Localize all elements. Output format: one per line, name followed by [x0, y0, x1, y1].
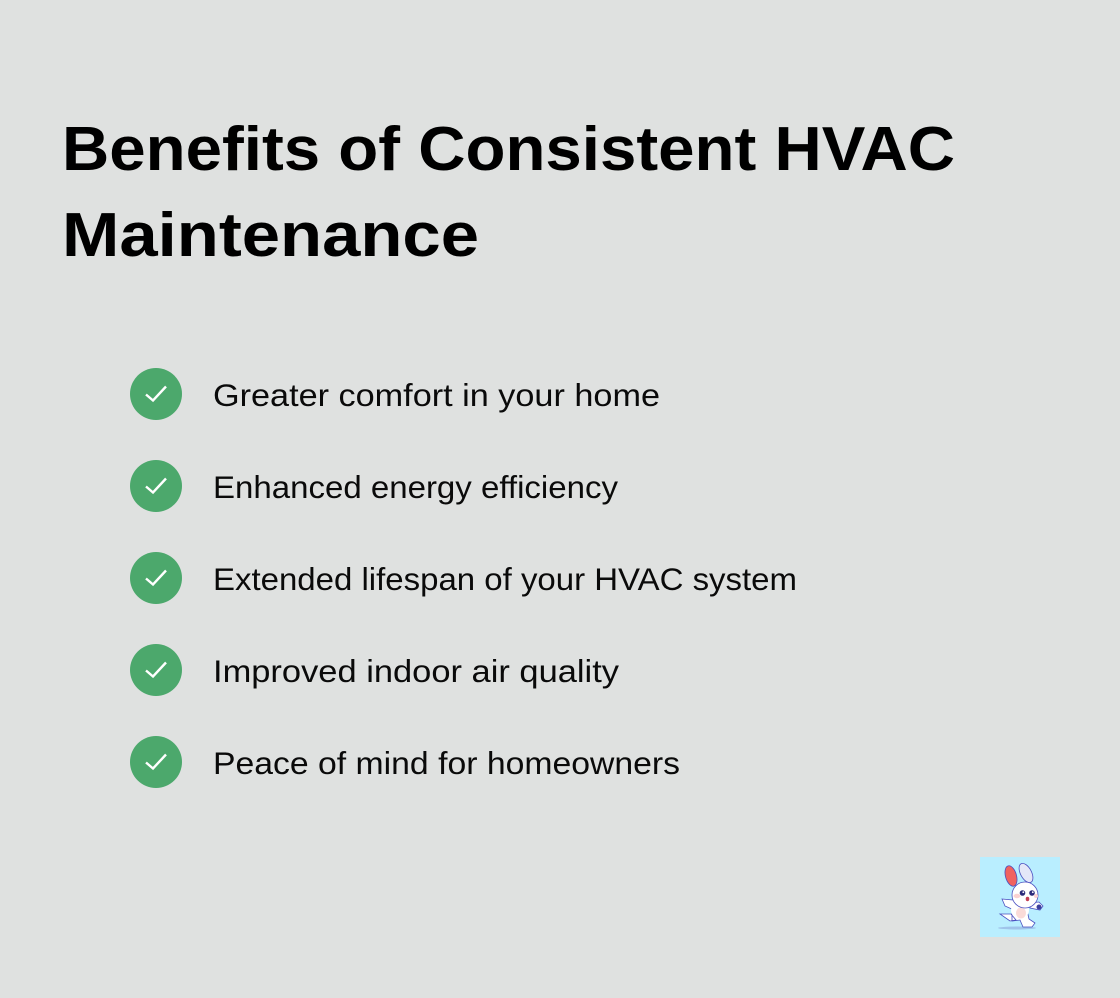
title [62, 115, 955, 270]
icon: running rabbit logo [980, 857, 1060, 937]
item: indoor air quality [130, 644, 619, 696]
item: energy efficiency: Enhanced energy efficiency [213, 469, 618, 505]
item: extended lifespan [130, 552, 797, 604]
item: peace of mind [130, 736, 680, 788]
item: energy efficiency [130, 460, 618, 512]
title: Maintenance [62, 201, 479, 270]
item: greater comfort: Greater comfort in your home [213, 377, 660, 413]
title: Benefits of Consistent HVAC [62, 115, 955, 184]
item: greater comfort [130, 368, 660, 420]
item: indoor air quality: Improved indoor air quality [213, 653, 619, 689]
item: peace of mind: Peace of mind for homeowners [213, 745, 680, 781]
benefits checklist [130, 368, 797, 788]
item: extended lifespan: Extended lifespan of your HVAC system [213, 561, 797, 597]
